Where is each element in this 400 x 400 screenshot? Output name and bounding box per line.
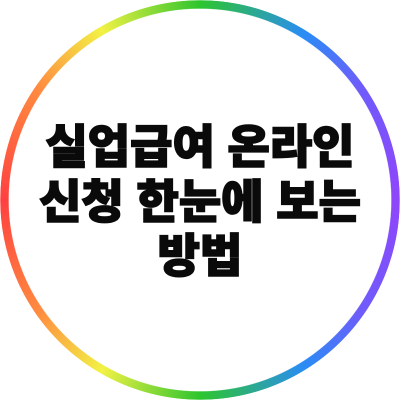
title: 방법 (158, 230, 242, 282)
title (39, 121, 361, 282)
title: 실업급여 온라인 (45, 121, 355, 173)
title: 신청 한눈에 보는 (39, 176, 361, 228)
